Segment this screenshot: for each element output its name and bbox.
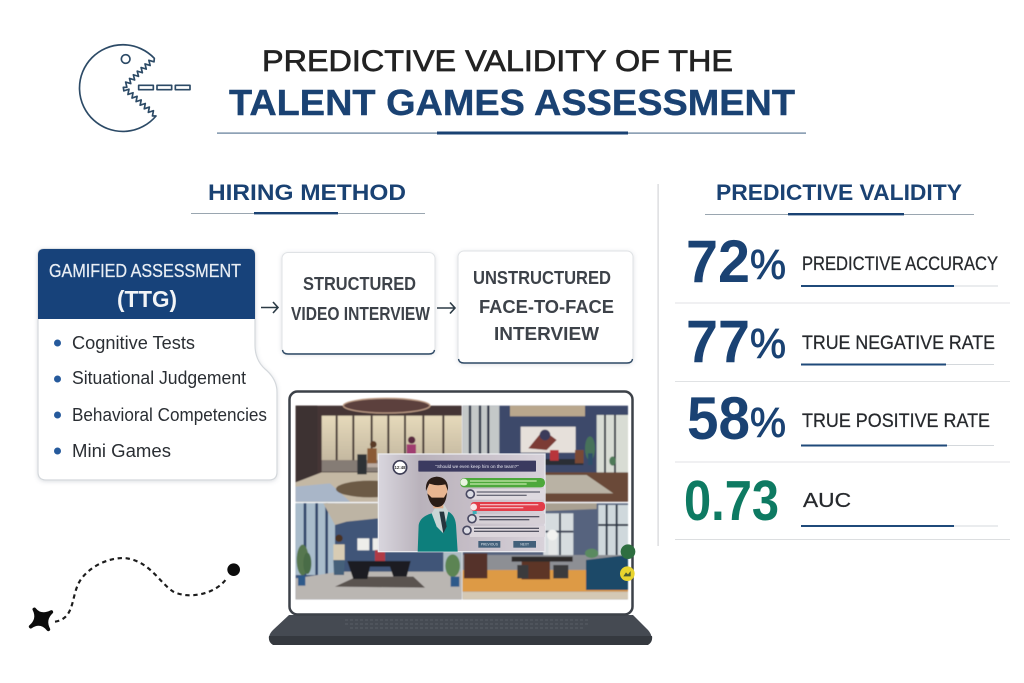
panel: unstructured face-to-face interview: INTERVIEW — [494, 324, 599, 344]
metric: true positive rate: TRUE POSITIVE RATE — [802, 411, 990, 432]
title: PREDICTIVE VALIDITY OF THE — [262, 45, 733, 78]
next button — [513, 541, 536, 548]
dashed path with star and dot — [31, 558, 240, 629]
timer: 12:48 — [394, 465, 406, 470]
game dialog — [378, 454, 545, 552]
metric: true negative rate: TRUE NEGATIVE RATE — [802, 333, 995, 354]
icon: pacman — [80, 45, 190, 131]
scene: office bottom-left — [296, 503, 462, 599]
answer options — [460, 478, 545, 537]
metric: predictive accuracy — [686, 228, 998, 295]
metric: true positive rate: % — [750, 399, 786, 446]
list of assessment components — [54, 333, 267, 461]
list of assessment components: Situational Judgement — [72, 368, 246, 388]
panel: unstructured face-to-face interview: FACE-TO-FACE — [479, 297, 614, 317]
timer — [393, 461, 407, 474]
panel: unstructured face-to-face interview — [458, 251, 633, 363]
scene: executive office top-left — [296, 398, 462, 502]
previous button: PREVIOUS — [481, 543, 499, 547]
game screenshot — [296, 398, 635, 599]
list of assessment components: Cognitive Tests — [72, 333, 195, 353]
metric: auc — [684, 469, 998, 533]
panel header: GAMIFIED ASSESSMENT — [49, 260, 241, 281]
title: TALENT GAMES ASSESSMENT — [229, 82, 795, 123]
list of assessment components: Mini Games — [72, 441, 171, 461]
panel: unstructured face-to-face interview: UNSTRUCTURED — [473, 268, 611, 288]
panel header: (TTG) — [117, 286, 177, 312]
laptop illustration — [269, 392, 652, 645]
side badges — [620, 544, 635, 581]
heading: hiring method: HIRING METHOD — [208, 180, 406, 205]
metric: auc: AUC — [803, 490, 851, 512]
vertical divider — [658, 184, 659, 546]
question bar: "Should we even keep him on the team?" — [435, 464, 519, 469]
laptop screen bezel — [290, 392, 632, 614]
metric: true positive rate — [687, 385, 994, 452]
metric: true negative rate: 77 — [686, 308, 750, 375]
panel: structured video interview: STRUCTURED — [303, 274, 416, 294]
laptop base — [269, 615, 652, 645]
metric: predictive accuracy: % — [750, 241, 786, 288]
question bar — [418, 461, 536, 472]
arrow: gamified to structured — [261, 302, 278, 313]
avatar: bearded man in teal suit — [418, 477, 458, 552]
arrow: structured to unstructured — [437, 302, 455, 314]
heading: predictive validity: PREDICTIVE VALIDITY — [716, 180, 962, 205]
metric: auc: 0.73 — [684, 469, 779, 533]
panel: structured video interview — [282, 252, 435, 354]
metric: predictive accuracy: PREDICTIVE ACCURACY — [802, 254, 998, 275]
previous button — [478, 541, 500, 548]
panel: gamified assessment — [38, 249, 277, 480]
scene: lounge bottom-right — [463, 503, 628, 599]
metric: true negative rate: % — [750, 320, 786, 367]
metric: true negative rate — [686, 308, 995, 375]
metric: predictive accuracy: 72 — [686, 228, 750, 295]
title — [217, 45, 806, 134]
panel: structured video interview: VIDEO INTERVIEW — [291, 304, 430, 324]
panel header — [38, 249, 255, 319]
next button: NEXT — [520, 543, 529, 547]
list of assessment components: Behavioral Competencies — [72, 405, 267, 425]
metric: true positive rate: 58 — [687, 385, 750, 452]
scene: meeting room top-right — [463, 406, 628, 502]
